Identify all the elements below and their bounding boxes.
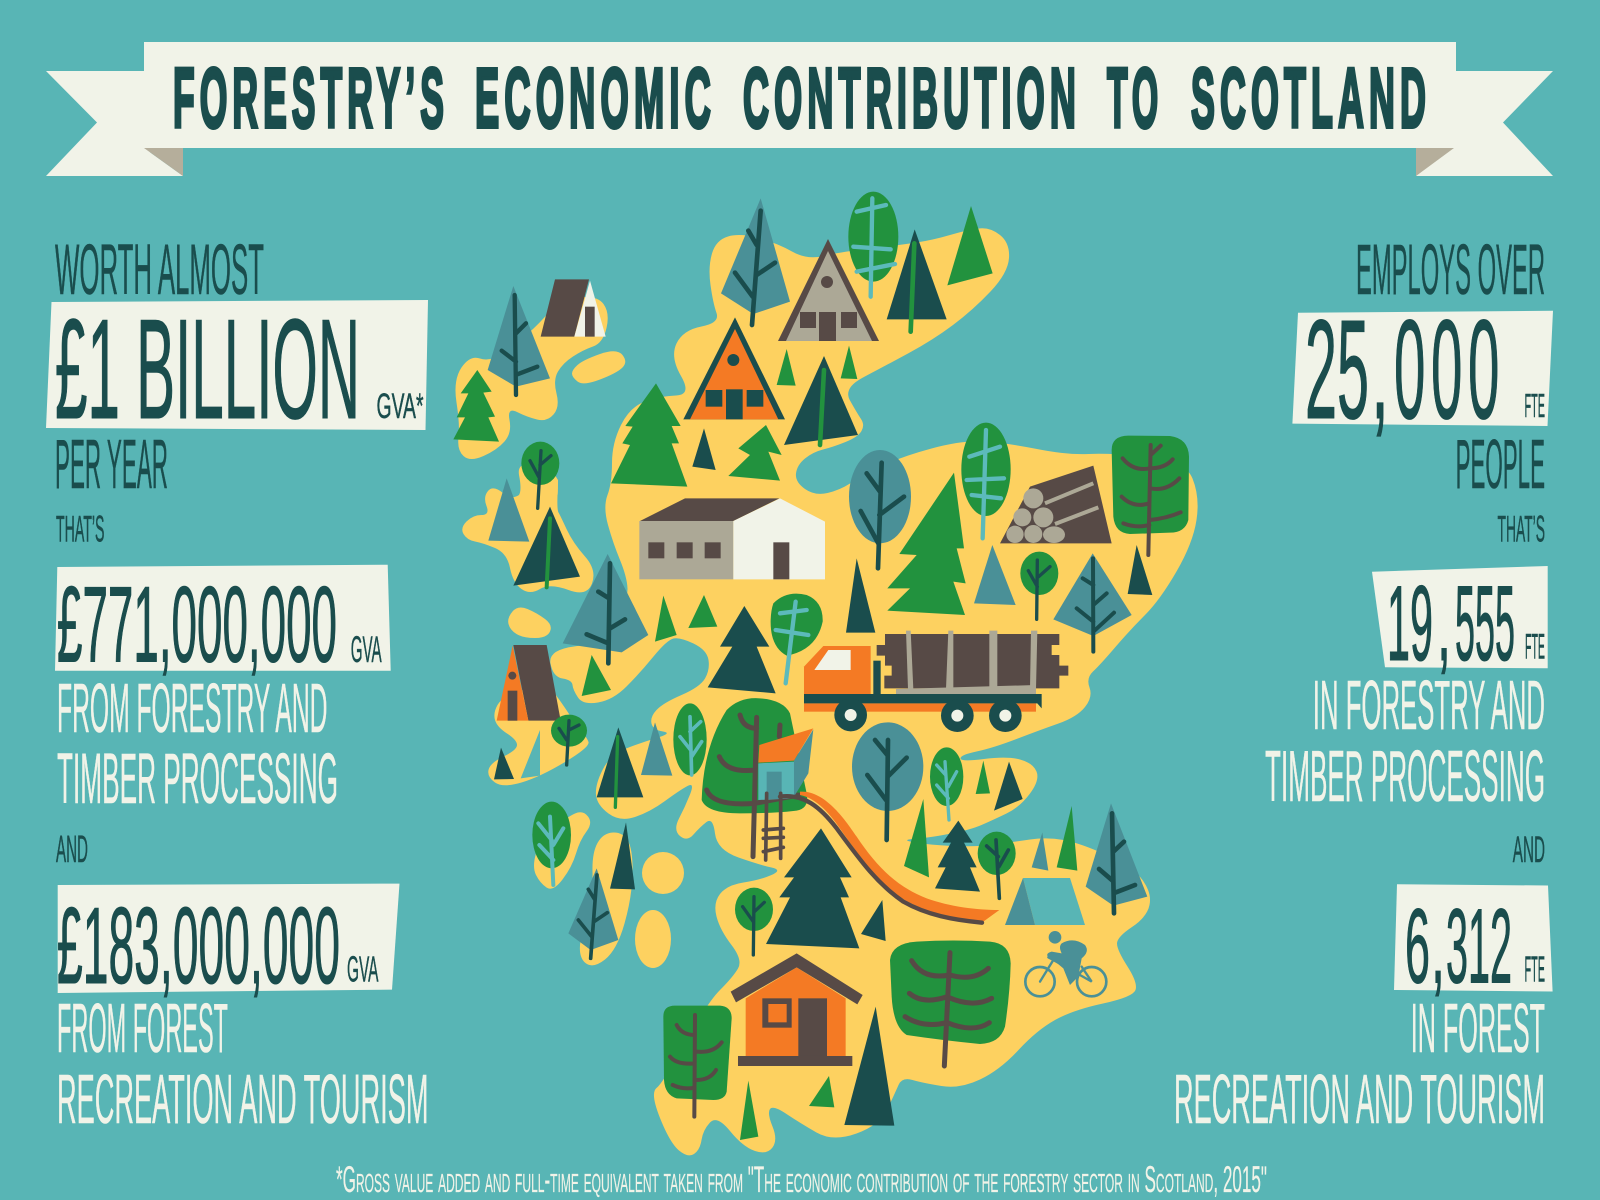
pine: dark: [708, 606, 776, 693]
tree: dark with green trunk: [513, 507, 580, 587]
west and central map icons: [488, 478, 825, 857]
icon: cyclist: [1025, 931, 1106, 996]
pine: big green: [611, 383, 687, 487]
tree: dark triangle: [887, 229, 947, 332]
tent: [1005, 878, 1085, 925]
tree: small green triangle: [777, 349, 796, 386]
log pile: [1000, 466, 1112, 543]
tree: small green triangle: [976, 761, 990, 794]
panel: left GVA figures: £771,000,000: [57, 564, 337, 684]
panel: left GVA figures: WORTH ALMOST: [55, 231, 264, 310]
tree: green with pale trunk: [771, 594, 823, 683]
title: TO: [1107, 51, 1163, 145]
tree: green oval: [961, 423, 1011, 538]
title: FORESTRY’S: [173, 51, 449, 145]
tree: tall green: [904, 799, 929, 877]
title banner: [46, 42, 1553, 176]
tree: teal big kite: [563, 554, 648, 663]
value box: 6312: [1394, 884, 1553, 992]
north-east map icons: [841, 192, 1189, 652]
banner left tail: [46, 71, 150, 176]
value box: 19555: [1372, 566, 1548, 668]
tree: teal kite: [568, 868, 618, 958]
tree: round green: [978, 832, 1016, 898]
value: 6312: ,: [1431, 888, 1445, 1006]
cabin: orange and brown: [497, 645, 561, 721]
tree: teal round: [852, 722, 923, 840]
banner right fold: [1416, 148, 1454, 176]
ladder: [763, 793, 783, 860]
tree: tall green oval: [848, 192, 898, 297]
text: FTE: [1524, 948, 1545, 990]
tree: teal round: [849, 450, 911, 568]
tree: teal kite: [1053, 553, 1132, 652]
tree: green oval: [673, 703, 707, 775]
panel: right employment figures: [1174, 231, 1553, 1138]
tree: teal north island: [488, 286, 550, 395]
land: oval islet: [635, 910, 671, 968]
tree: rounded square green: [1112, 436, 1189, 555]
treehouse tree: [702, 698, 807, 857]
land: small island: [572, 351, 625, 383]
tree: small teal: [1032, 832, 1048, 871]
tree: small dark: [692, 428, 716, 470]
banner left fold: [144, 148, 183, 176]
tree: tall green: [740, 1081, 758, 1140]
unit: GVA star: GVA*: [376, 387, 424, 426]
cabin: orange A-frame: [683, 317, 785, 419]
tree: small dark triangle: [494, 748, 514, 779]
tree: dark triangle: [846, 558, 875, 633]
value box: 183 million: [58, 884, 399, 993]
panel: left GVA figures: GVA: [347, 948, 378, 990]
banner main strip: [144, 42, 1456, 148]
tree: teal triangle west island: [488, 478, 529, 542]
land: west island: [462, 464, 593, 592]
tree: small round green: [551, 715, 587, 765]
tree: round green west island: [521, 442, 559, 508]
text: FTE: [1525, 628, 1545, 667]
tree: small dark: [861, 900, 886, 941]
cabin: orange house: [731, 953, 863, 1066]
value box: 1 billion: [46, 300, 428, 430]
pine: small dark: [935, 821, 980, 892]
land: islet: [508, 607, 551, 638]
title: CONTRIBUTION: [743, 51, 1081, 145]
tree: small green triangle: [582, 655, 611, 696]
north-west map icons: [453, 198, 796, 508]
value: 19555: 19: [1387, 563, 1433, 683]
tree: small dark triangle: [994, 762, 1023, 811]
tree: dark with green trunk: [597, 727, 643, 807]
value: 19555: ,: [1437, 563, 1451, 683]
log truck: [804, 631, 1068, 732]
text: FTE: [1524, 387, 1545, 424]
tree: small round green: [1020, 552, 1058, 619]
tree: big dark with green trunk: [784, 356, 858, 445]
land: round islet: [642, 852, 684, 894]
tree: teal triangle: [641, 722, 672, 776]
pine: big dark: [766, 828, 859, 948]
tree: small green triangle: [841, 346, 857, 379]
panel: left GVA figures: £1 BILLION: [55, 290, 360, 449]
title: ECONOMIC: [475, 51, 716, 145]
tree: teal top: [721, 198, 790, 325]
panel: left GVA figures: AND: [56, 829, 88, 871]
tree: round green: [735, 888, 773, 955]
tree: dark triangle: [610, 822, 635, 889]
tree: green oval: [532, 802, 571, 885]
sawmill building: [639, 498, 825, 579]
pine: small green: [728, 425, 782, 481]
text: RECREATION AND TOURISM: [57, 1060, 428, 1138]
panel: left GVA figures: GVA: [351, 629, 382, 670]
slide: [780, 792, 999, 923]
tree: small dark triangle: [1128, 545, 1152, 595]
tree: pale triangle: [521, 730, 540, 778]
tree: tall green: [1057, 806, 1077, 871]
truck, slide and east-central icons: [780, 631, 1147, 923]
panel: left GVA figures: [46, 231, 428, 1138]
cabin: brown and white north island: [541, 279, 606, 337]
banner left tail second part: [144, 148, 183, 176]
treehouse: [758, 728, 813, 800]
value: 6312: 6: [1405, 888, 1430, 1006]
tree: small green triangle: [688, 595, 717, 628]
panel: left GVA figures: THAT’S: [56, 508, 104, 550]
tree: green triangle: [947, 206, 993, 285]
land: mainland: [550, 228, 1198, 1155]
tree: green oval: [930, 747, 963, 820]
panel: left GVA figures: FROM FOREST: [57, 989, 228, 1067]
panel: right employment figures: AND: [1513, 829, 1545, 870]
value box: 25000: [1292, 311, 1553, 426]
text: FROM FORESTRY AND: [57, 669, 328, 747]
banner right tail: [1416, 71, 1553, 176]
pine: big green: [887, 473, 966, 615]
land: tree island: [534, 812, 590, 889]
south-west map icons: [532, 802, 894, 1140]
text: TIMBER PROCESSING: [57, 740, 338, 819]
land: northern island: [455, 297, 608, 459]
land: cabin island: [488, 690, 589, 785]
panel: left GVA figures: £183,000,000: [57, 885, 340, 1007]
value: 25000: ,: [1371, 290, 1389, 448]
land: long island: [580, 832, 633, 965]
tree: rounded green: [663, 1006, 732, 1117]
tree: tall dark: [844, 1007, 894, 1126]
tree: teal kite: [1086, 803, 1147, 913]
tree: big rounded green: [890, 940, 1011, 1066]
panel: left GVA figures: PER YEAR: [55, 425, 168, 503]
value: 25000: 25: [1305, 290, 1369, 448]
tree: teal triangle: [974, 545, 1016, 605]
pine: green north island: [453, 370, 499, 442]
cabin: grey A-frame: [778, 239, 879, 341]
map of Scotland: [453, 192, 1198, 1155]
tree: small green triangle: [655, 596, 677, 642]
value box: 771 million: [55, 565, 391, 671]
south-east map icons: [890, 931, 1106, 1066]
tree: small green: [809, 1076, 834, 1107]
